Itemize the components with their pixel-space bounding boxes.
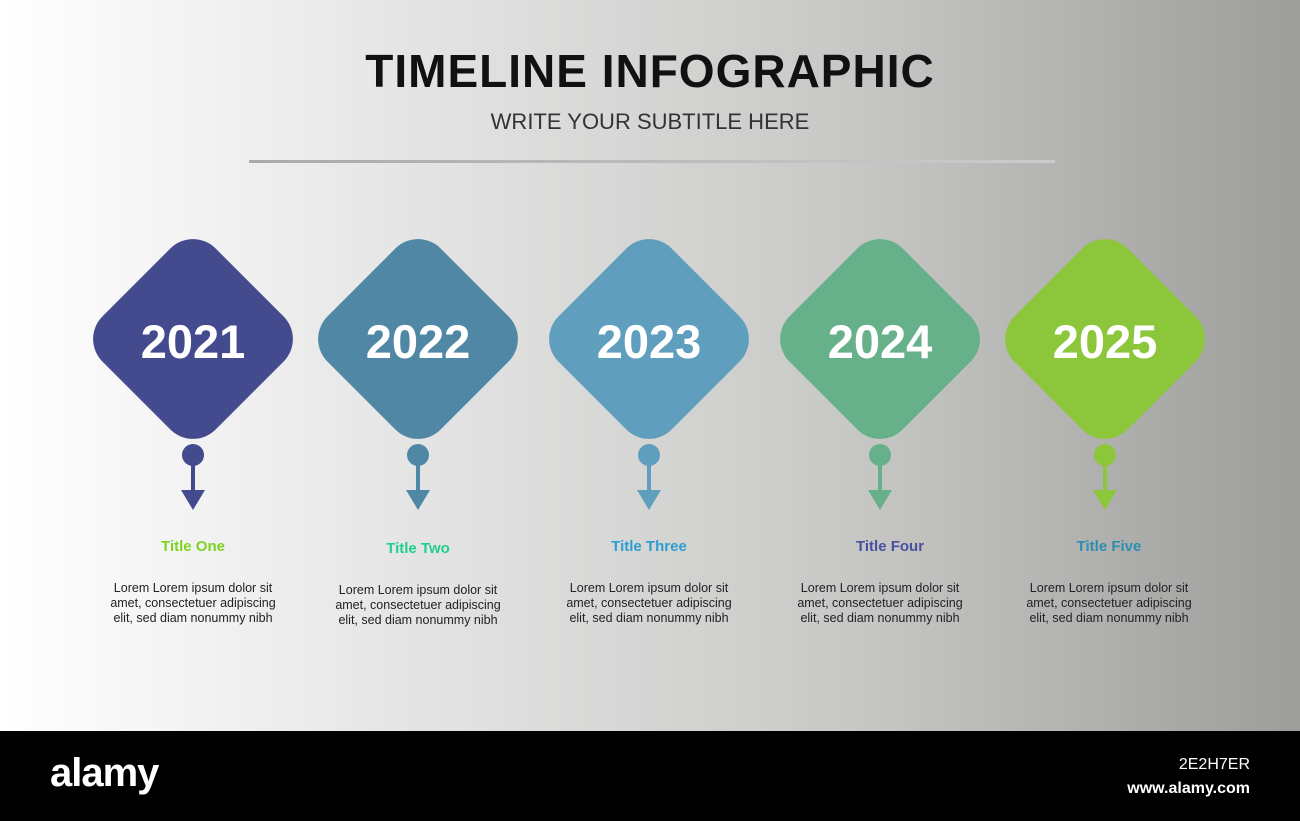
- description: amet, consectetuer adipiscing: [110, 596, 276, 610]
- item 2023: [549, 239, 749, 625]
- description: [110, 581, 276, 625]
- title four: Title Four: [856, 538, 924, 555]
- diamond 2022: [305, 226, 531, 452]
- description: amet, consectetuer adipiscing: [797, 596, 963, 610]
- title two: Title Two: [386, 540, 450, 557]
- title three: Title Three: [611, 538, 687, 555]
- description: Lorem Lorem ipsum dolor sit: [114, 581, 272, 595]
- year 2023: 2023: [597, 315, 701, 368]
- year 2024: 2024: [828, 315, 932, 368]
- description: elit, sed diam nonummy nibh: [800, 611, 960, 625]
- title: TIMELINE INFOGRAPHIC: [365, 45, 935, 97]
- footer id: www.alamy.com: [1127, 780, 1250, 797]
- footer bar: [0, 731, 1300, 821]
- pin arrow: [1093, 444, 1117, 510]
- description: [797, 581, 963, 625]
- description: [566, 581, 732, 625]
- description: elit, sed diam nonummy nibh: [338, 613, 498, 627]
- description: Lorem Lorem ipsum dolor sit: [570, 581, 728, 595]
- item 2022: [318, 239, 518, 627]
- description: Lorem Lorem ipsum dolor sit: [1030, 581, 1188, 595]
- description: amet, consectetuer adipiscing: [335, 598, 501, 612]
- description: amet, consectetuer adipiscing: [1026, 596, 1192, 610]
- footer logo: alamy: [50, 751, 158, 795]
- diamond 2021: [80, 226, 306, 452]
- footer id: 2E2H7ER: [1179, 756, 1250, 773]
- pin arrow: [868, 444, 892, 510]
- year 2025: 2025: [1053, 315, 1157, 368]
- year 2021: 2021: [141, 315, 245, 368]
- description: [335, 583, 501, 627]
- year 2022: 2022: [366, 315, 470, 368]
- description: [1026, 581, 1192, 625]
- item 2025: [1005, 239, 1205, 625]
- subtitle: WRITE YOUR SUBTITLE HERE: [491, 109, 809, 134]
- diamond 2023: [536, 226, 762, 452]
- pin arrow: [406, 444, 430, 510]
- item 2021: [93, 239, 293, 625]
- footer id: [1127, 756, 1250, 797]
- description: elit, sed diam nonummy nibh: [1029, 611, 1189, 625]
- item 2024: [780, 239, 980, 625]
- diamond 2025: [992, 226, 1218, 452]
- description: Lorem Lorem ipsum dolor sit: [339, 583, 497, 597]
- title five: Title Five: [1077, 538, 1141, 555]
- pin arrow: [637, 444, 661, 510]
- description: elit, sed diam nonummy nibh: [113, 611, 273, 625]
- description: amet, consectetuer adipiscing: [566, 596, 732, 610]
- description: elit, sed diam nonummy nibh: [569, 611, 729, 625]
- description: Lorem Lorem ipsum dolor sit: [801, 581, 959, 595]
- pin arrow: [181, 444, 205, 510]
- title one: Title One: [161, 538, 225, 555]
- diamond 2024: [767, 226, 993, 452]
